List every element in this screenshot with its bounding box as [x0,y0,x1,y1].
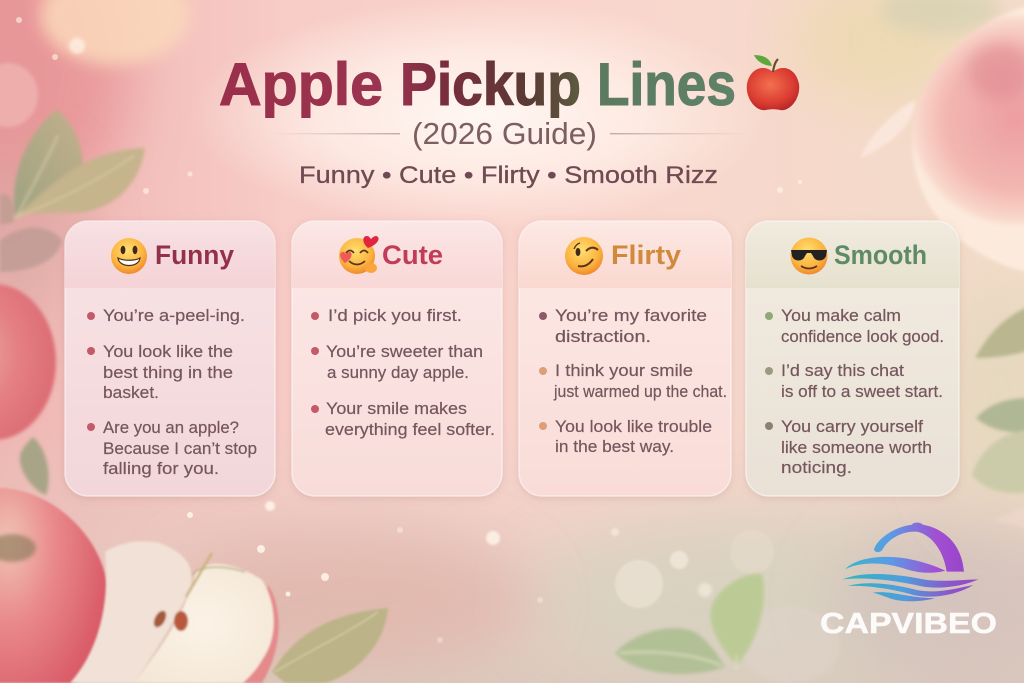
list: funny lines: Because I can’t stop [103,439,257,458]
apple half slice [70,541,279,683]
leaves: right edge [972,306,1024,530]
bokeh sparkles [0,17,802,643]
list: flirty lines: distraction. [555,327,651,346]
list: funny lines: Are you an apple? [103,418,239,437]
heading: Funny: Funny [155,240,234,270]
icon: grinning face [111,238,147,274]
list: funny lines: You’re a-peel-ing. [103,306,245,325]
heading: Cute: Cute [382,240,443,270]
list: smooth lines: I’d say this chat [781,361,904,380]
leaf: lower left [20,437,49,495]
logo wordmark: CAPVIBEO [820,608,997,640]
apple: bottom left [0,488,108,683]
list: smooth lines: like someone worth [781,438,932,457]
list: smooth lines [765,306,944,477]
panel: funny [65,221,275,496]
title: Apple [219,51,383,118]
list: flirty lines: You’re my favorite [555,306,707,325]
title [219,51,736,118]
list: funny lines: You look like the [103,342,233,361]
list: smooth lines: You make calm [781,306,901,325]
list: flirty lines: in the best way. [555,437,674,456]
subtitle: (2026 Guide) [412,116,597,151]
list: funny lines: best thing in the [103,363,233,382]
list: cute lines: Your smile makes [326,399,467,418]
list: funny lines: falling for you. [103,459,219,478]
icon: cap and waves [843,523,978,601]
list: smooth lines: noticing. [781,458,852,477]
title: Lines [597,51,736,118]
list: smooth lines: You carry yourself [781,417,923,436]
list: smooth lines: is off to a sweet start. [781,382,943,401]
list: funny lines [87,306,257,478]
icon: smiling face with hearts [339,236,379,274]
apple: top right [860,6,1024,272]
panel: smooth [746,221,959,496]
icon: winking face [565,237,603,275]
list: cute lines [311,306,495,439]
panel: flirty [519,221,731,496]
panel: cute [292,221,502,496]
title: Pickup [400,51,581,118]
apple: mid left [0,284,56,440]
list: flirty lines [539,306,727,456]
logo: Capvibeo [820,523,997,640]
leaf: bottom centre [272,608,388,683]
icon: sunglasses face [790,238,828,274]
icon: red apple [747,55,799,110]
heading: Smooth: Smooth [834,240,927,270]
list: cute lines: everything feel softer. [325,420,495,439]
tagline: Funny • Cute • Flirty • Smooth Rizz [299,162,718,189]
list: cute lines: I’d pick you first. [328,306,462,325]
heading: Flirty: Flirty [611,240,681,270]
leaves: upper left branch [0,109,145,272]
leaves: bottom right sprout [615,574,840,683]
list: flirty lines: just warmed up the chat. [553,382,727,401]
list: flirty lines: You look like trouble [555,417,712,436]
list: cute lines: You’re sweeter than [326,342,483,361]
list: cute lines: a sunny day apple. [327,363,469,382]
list: smooth lines: confidence look good. [781,327,944,346]
list: funny lines: basket. [103,383,159,402]
list: flirty lines: I think your smile [555,361,693,380]
